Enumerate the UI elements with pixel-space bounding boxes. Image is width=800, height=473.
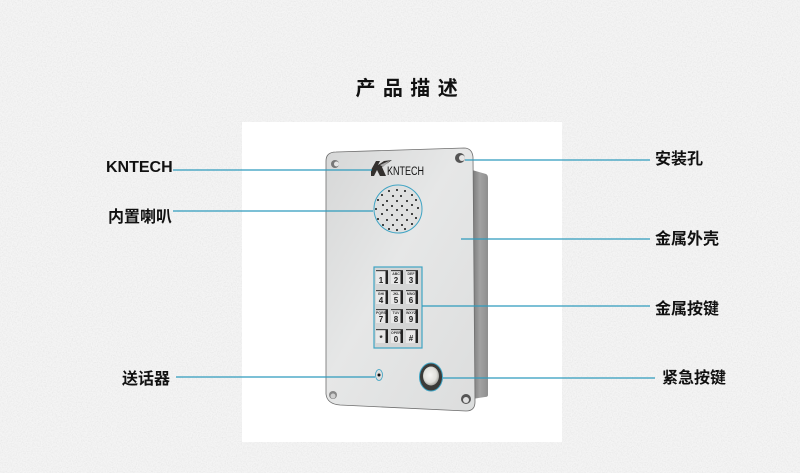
logo: KNTECH: KNTECH [387, 166, 424, 178]
logo: KNTECH [371, 160, 424, 178]
key row 3: 9 [409, 315, 414, 324]
label: mounting hole: 安装孔 [655, 150, 703, 168]
key row 4: 0 [394, 335, 399, 344]
key row 4: OPER [391, 331, 401, 335]
key row 2: 6 [409, 296, 414, 305]
key row 1: 3 [409, 276, 414, 285]
label: emergency key: 紧急按键 [662, 368, 726, 387]
device side housing [472, 170, 488, 399]
key row 1 [376, 270, 418, 285]
icon: mounting holes [329, 153, 471, 404]
leader lines [173, 160, 655, 378]
label: transmitter: 送话器 [122, 370, 170, 388]
label: metal keys: 金属按键 [655, 299, 719, 318]
key row 1: ABC [392, 272, 400, 276]
label: metal housing: 金属外壳 [655, 229, 719, 248]
key row 3 [376, 309, 418, 324]
key row 3: 7 [379, 315, 384, 324]
device front plate [326, 148, 475, 411]
key row 2: 5 [394, 296, 399, 305]
product: intercom device [326, 148, 488, 411]
key row 3: WXYZ [406, 311, 417, 315]
title: 产品描述 [356, 77, 465, 100]
key row 2: JKL [393, 292, 400, 296]
key row 4: # [409, 334, 414, 343]
key row 1: DEF [408, 272, 415, 276]
keypad [374, 267, 422, 348]
label: built-in speaker: 内置喇叭 [108, 208, 172, 226]
key row 2: MNO [407, 292, 415, 296]
emergency button [420, 363, 442, 391]
panel: product photo backdrop [242, 122, 562, 442]
key row 2: GHI [378, 292, 384, 296]
key row 1: 2 [394, 276, 399, 285]
microphone [376, 370, 382, 380]
label: KNTECH: KNTECH [106, 159, 173, 176]
key row 3: TUV [392, 311, 400, 315]
key row 2: 4 [379, 296, 384, 305]
key row 4 [376, 329, 418, 344]
key row 1: 1 [379, 276, 384, 285]
key row 3: 8 [394, 315, 399, 324]
key row 3: PQRS [376, 311, 387, 315]
key row 2 [376, 290, 418, 305]
key row 4: * [379, 334, 383, 343]
speaker grille [374, 185, 422, 233]
